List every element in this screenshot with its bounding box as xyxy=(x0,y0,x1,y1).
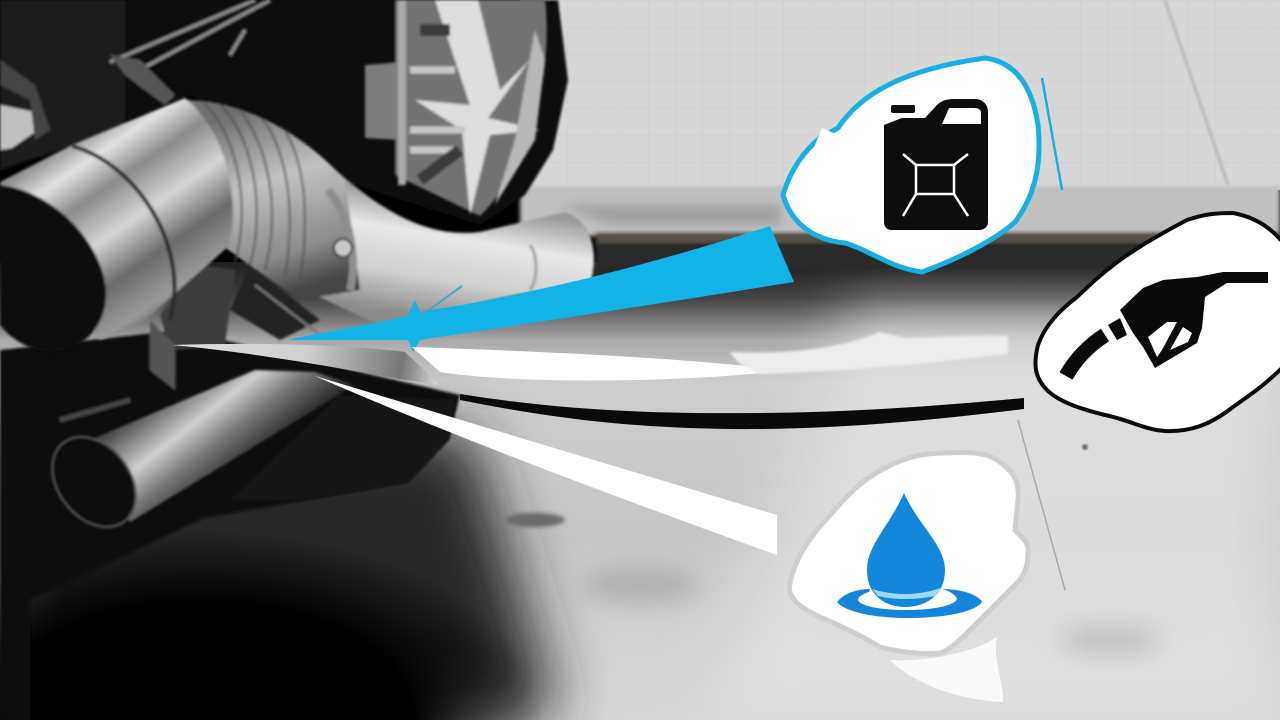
photo: alloy wheel and tyre xyxy=(365,0,547,216)
background: pavement and kerb xyxy=(520,0,1280,268)
blue accent line xyxy=(1042,78,1062,190)
thin grey line xyxy=(1018,420,1065,590)
photo: exhaust pipes xyxy=(0,98,594,544)
white badge with fuel nozzle xyxy=(1035,213,1280,431)
background: garage floor xyxy=(0,262,1280,720)
white spill under badge xyxy=(890,637,1003,702)
blue arrow band from fuel can xyxy=(288,226,794,352)
photo: dark engine bay xyxy=(0,0,568,720)
white water line xyxy=(315,376,777,555)
black fuel line xyxy=(460,394,1024,429)
icon: fuel jerry can xyxy=(884,99,988,230)
white and metal arrow band xyxy=(172,332,1008,385)
white badge with water drop xyxy=(789,453,1028,702)
icon: water drop with ripple xyxy=(837,493,982,618)
white cloud badge behind fuel can xyxy=(783,58,1039,272)
white badge nub xyxy=(815,128,845,160)
icon: fuel nozzle xyxy=(1066,272,1268,376)
